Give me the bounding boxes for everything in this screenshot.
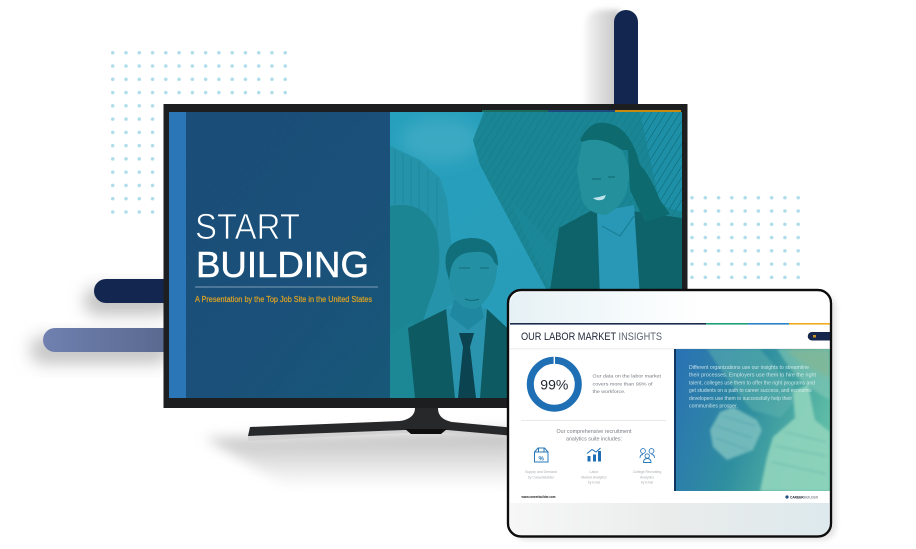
photo panel text: their processes. Employers use them to hire the right [689, 373, 817, 379]
icon captions: Supply and Demand [525, 470, 557, 474]
photo panel: thumbs up [674, 349, 830, 491]
dot grid: upper left [106, 46, 292, 219]
icon captions: by CareerBuilder [528, 476, 555, 480]
icon captions: by Emsi [641, 480, 653, 484]
tablet bottom strip [510, 503, 830, 535]
icon captions: Analytics [640, 476, 654, 480]
woman in foreground, back of head [390, 205, 439, 345]
suite intro text: analytics suite includes: [566, 436, 622, 442]
labor market coverage text: Our data on the labor market [592, 374, 662, 380]
labor market coverage text: covers more than 99% of [592, 381, 653, 387]
panel: teal photo of business people [390, 112, 682, 400]
page pill [808, 332, 830, 340]
slide top accent line [482, 110, 681, 112]
TV stand [248, 408, 515, 441]
vertical navy bar with shadow [586, 10, 638, 110]
floor shadow beneath TV [205, 430, 515, 488]
horizontal navy bar with shadow [84, 279, 174, 315]
donut chart 99%: 99% [540, 376, 568, 392]
footer url: www.careerbuilder.com [521, 495, 556, 499]
labor market coverage text [592, 374, 662, 395]
title: START BUILDING: BUILDING [196, 244, 369, 285]
tablet top strip [510, 292, 830, 323]
subtitle: A Presentation by the Top Job Site in the United States [195, 295, 372, 304]
tablet outline [508, 290, 831, 536]
building left [390, 146, 456, 320]
tablet header colour line [510, 323, 830, 325]
photo panel text [689, 365, 817, 410]
horizontal periwinkle bar with shadow [30, 328, 170, 364]
icon captions: College Recruiting [633, 470, 661, 474]
icon captions: by Emsi [588, 480, 600, 484]
photo panel text: talent, colleges use them to offer the right programs and [689, 380, 815, 386]
photo panel text: developers use them to successfully help their [689, 396, 792, 402]
icon captions: Labor [590, 470, 599, 474]
title divider [195, 286, 378, 288]
icon: college recruiting people [640, 449, 654, 462]
suite intro text: Our comprehensive recruitment [556, 429, 632, 435]
photo panel text: communities prosper. [689, 404, 738, 410]
title: START BUILDING: START [195, 206, 300, 247]
donut chart 99% [530, 356, 578, 408]
title: START BUILDING [195, 206, 369, 285]
header separator [510, 348, 830, 350]
businesswoman [550, 210, 682, 289]
dot grid: right [685, 191, 805, 284]
slide heading: OUR LABOR MARKET INSIGHTS [521, 331, 662, 343]
labor market coverage text: the workforce. [592, 389, 626, 395]
icon: supply and demand box [534, 448, 548, 462]
TV frame [164, 104, 688, 408]
TV screen: slide [169, 110, 682, 400]
man [408, 309, 507, 398]
footer logo: CAREERBUILDER [790, 494, 818, 500]
panel: navy title [169, 112, 390, 398]
section divider [521, 419, 666, 422]
icon: labor market analytics chart [587, 448, 601, 462]
building right [473, 112, 682, 300]
tablet [508, 290, 836, 540]
icon captions: Market Analytics [581, 476, 607, 480]
photo panel text: Different organizations use our insights to streamline [689, 365, 809, 371]
icon: supply and demand box: % [539, 456, 545, 462]
photo panel text: get students on a path to career success, and economic [689, 388, 812, 394]
icon captions [525, 470, 661, 484]
suite intro text [556, 429, 632, 442]
